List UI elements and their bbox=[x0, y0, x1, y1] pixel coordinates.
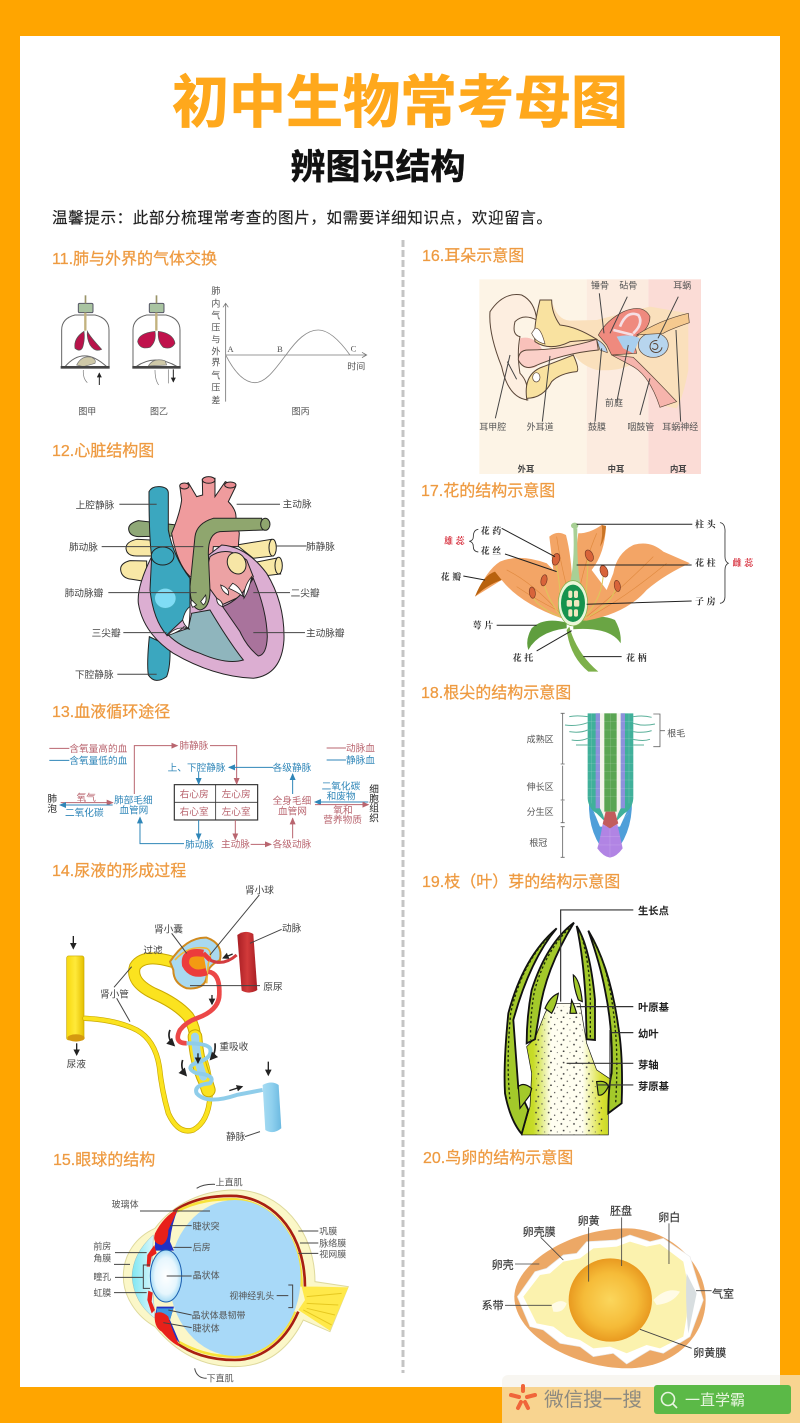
leaf texture bbox=[508, 928, 617, 1103]
valves bbox=[167, 577, 252, 636]
ear labels: 中耳 bbox=[608, 464, 624, 474]
flower labels: 花瓣 bbox=[441, 571, 464, 582]
flow labels: 肺静脉 bbox=[179, 740, 209, 752]
ear labels: 耳蜗神经 bbox=[662, 421, 698, 432]
heart chambers box: 左心房 bbox=[222, 788, 251, 800]
heart labels bbox=[65, 498, 345, 681]
pulmonary veins left bbox=[121, 521, 177, 582]
bell jar A bbox=[61, 295, 110, 416]
shell bbox=[514, 1228, 706, 1368]
heart chambers box bbox=[174, 785, 258, 820]
ear labels: 耳甲腔 bbox=[479, 421, 506, 432]
search button bbox=[654, 1385, 791, 1414]
outer leaves bbox=[505, 923, 622, 1134]
choroid and retina bbox=[173, 1196, 305, 1360]
vertical labels: 织 bbox=[369, 812, 379, 824]
legend left bbox=[49, 743, 128, 767]
egg labels: 卵白 bbox=[658, 1210, 680, 1224]
labels: 原尿 bbox=[263, 982, 283, 993]
eustachian tube bbox=[612, 355, 677, 407]
pressure curve chart: 肺 bbox=[211, 286, 220, 296]
vertical labels: 泡 bbox=[47, 803, 57, 815]
renal capsule bbox=[170, 938, 263, 1100]
anterior chamber and lens bbox=[132, 1235, 155, 1318]
flower labels bbox=[441, 519, 756, 663]
heart chambers box: 右心室 bbox=[180, 806, 209, 818]
eye labels bbox=[93, 1177, 346, 1383]
watermark text: 微信搜一搜 bbox=[544, 1389, 642, 1411]
collecting duct bbox=[67, 956, 85, 1042]
flow labels: 血管网 bbox=[119, 804, 148, 816]
eye labels: 玻璃体 bbox=[112, 1198, 139, 1209]
heading 17: 17.花的结构示意图 bbox=[421, 481, 555, 500]
vertical labels: 组 bbox=[369, 802, 379, 814]
bell jar A: 图甲 bbox=[78, 406, 96, 416]
legend right: 动脉血 bbox=[346, 743, 375, 755]
eye labels: 晶状体 bbox=[193, 1270, 220, 1281]
shell membrane bbox=[517, 1235, 703, 1364]
renal tubule bbox=[85, 958, 210, 1131]
heart labels: 主动脉瓣 bbox=[306, 628, 345, 640]
labels: 肾小球 bbox=[245, 884, 274, 896]
pistil and ovary bbox=[558, 523, 588, 626]
diagram: bird egg bbox=[482, 1203, 734, 1368]
legend right bbox=[327, 743, 375, 767]
pressure curve chart: 气 bbox=[211, 369, 220, 380]
egg labels bbox=[482, 1203, 734, 1359]
diagram: ear bbox=[479, 279, 701, 474]
epidermis and cortex bbox=[588, 713, 633, 822]
flow labels bbox=[65, 740, 362, 851]
heart chambers box: 右心房 bbox=[180, 788, 209, 800]
vertical labels: 细 bbox=[369, 784, 379, 796]
pressure curve chart: 与 bbox=[211, 335, 220, 345]
eye labels: 脉络膜 bbox=[319, 1237, 346, 1248]
eye labels: 睫状突 bbox=[193, 1220, 220, 1231]
pulmonary artery bbox=[190, 518, 263, 610]
root labels: 分生区 bbox=[527, 806, 554, 817]
heart labels: 三尖瓣 bbox=[92, 628, 121, 640]
heading 18: 18.根尖的结构示意图 bbox=[421, 683, 571, 702]
ear labels: 内耳 bbox=[670, 464, 687, 474]
right ventricle bbox=[168, 610, 243, 661]
flow labels: 和废物 bbox=[327, 790, 356, 802]
legend right: 静脉血 bbox=[346, 755, 375, 767]
pressure curve chart: 界 bbox=[211, 357, 220, 367]
flow labels: 肺动脉 bbox=[185, 839, 214, 851]
ear labels: 锤骨 bbox=[591, 279, 609, 290]
cochlea bbox=[638, 333, 668, 357]
ear labels: 鼓膜 bbox=[588, 421, 606, 432]
eye labels: 晶状体悬韧带 bbox=[192, 1309, 246, 1320]
egg labels: 卵壳膜 bbox=[523, 1224, 556, 1238]
bell jar B bbox=[132, 295, 181, 416]
eye labels: 下直肌 bbox=[207, 1372, 234, 1383]
flower labels: 萼片 bbox=[473, 620, 496, 631]
flow labels: 氧气 bbox=[77, 792, 96, 804]
ciliary body and iris bbox=[147, 1208, 180, 1347]
subtitle: 辨图识结构 bbox=[290, 148, 466, 187]
root cap purple bbox=[597, 824, 623, 858]
eye labels: 上直肌 bbox=[216, 1177, 243, 1188]
stem and sepals bbox=[527, 617, 621, 672]
pressure curve chart: 气 bbox=[211, 310, 220, 321]
heart chambers box: 左心室 bbox=[222, 806, 251, 818]
egg labels: 卵黄 bbox=[578, 1213, 600, 1227]
flower labels: 花药 bbox=[481, 525, 504, 536]
optic nerve bbox=[298, 1287, 348, 1331]
labels: 过滤 bbox=[143, 944, 163, 956]
flow labels: 肺部毛细 bbox=[114, 794, 153, 806]
heart labels: 二尖瓣 bbox=[291, 588, 320, 600]
diagram: eyeball bbox=[93, 1177, 348, 1383]
pressure curve chart: 差 bbox=[211, 395, 220, 406]
flow labels: 主动脉 bbox=[221, 838, 250, 850]
pulmonary veins right bbox=[237, 539, 282, 576]
left atrium bbox=[208, 552, 253, 605]
bud stem core bbox=[522, 1003, 620, 1135]
heading 12: 12.心脏结构图 bbox=[52, 442, 154, 460]
bud labels bbox=[561, 904, 670, 1093]
albumen bbox=[523, 1242, 688, 1353]
flow labels: 全身毛细 bbox=[273, 795, 311, 807]
search button: 一直学霸 bbox=[685, 1392, 745, 1409]
chalaza bbox=[552, 1290, 680, 1312]
flow labels: 各级静脉 bbox=[273, 762, 312, 774]
flow labels: 氧和 bbox=[333, 804, 353, 816]
eardrum bbox=[597, 339, 607, 353]
pressure curve chart: B bbox=[277, 344, 283, 354]
filaments and anthers bbox=[529, 549, 621, 618]
icon: search star bbox=[511, 1386, 535, 1408]
labels: 动脉 bbox=[282, 923, 302, 935]
arrows bbox=[73, 936, 268, 1091]
heart labels: 肺静脉 bbox=[306, 541, 335, 553]
egg labels: 卵壳 bbox=[492, 1258, 514, 1272]
labels: 尿液 bbox=[67, 1058, 86, 1070]
flow labels: 二氧化碳 bbox=[322, 780, 361, 792]
root labels: 根毛 bbox=[667, 728, 685, 739]
root labels: 成熟区 bbox=[527, 734, 554, 745]
eye labels: 睫状体 bbox=[193, 1323, 220, 1334]
labels: 肾小囊 bbox=[154, 923, 183, 935]
meristem bbox=[603, 812, 618, 828]
root labels: 根冠 bbox=[529, 837, 547, 848]
flow labels: 各级动脉 bbox=[273, 838, 312, 850]
bud labels: 幼叶 bbox=[638, 1027, 659, 1040]
root hairs bbox=[565, 716, 655, 745]
heart labels: 上腔静脉 bbox=[76, 499, 115, 511]
bud labels: 芽轴 bbox=[638, 1058, 659, 1071]
ear labels: 耳蜗 bbox=[673, 280, 691, 290]
eye labels: 视网膜 bbox=[319, 1248, 346, 1259]
flower labels: 雌蕊 bbox=[733, 557, 756, 568]
diagram: root tip bbox=[527, 713, 685, 858]
heading 13: 13.血液循环途径 bbox=[52, 703, 170, 721]
flower labels: 柱头 bbox=[695, 519, 718, 530]
diagram: heart bbox=[65, 477, 345, 681]
heading 11: 11.肺与外界的气体交换 bbox=[52, 250, 217, 268]
diagram: urine formation bbox=[67, 884, 302, 1143]
flow labels: 上、下腔静脉 bbox=[168, 762, 226, 774]
cochlear nerve bbox=[637, 313, 689, 335]
tip text: 温馨提示：此部分梳理常考查的图片，如需要详细知识点，欢迎留言。 bbox=[52, 209, 552, 227]
right atrium and superior vena cava bbox=[149, 487, 190, 635]
eye labels: 瞳孔 bbox=[93, 1271, 111, 1282]
vein vessel bbox=[263, 1082, 281, 1132]
ear labels: 外耳道 bbox=[527, 421, 554, 432]
bud labels: 叶原基 bbox=[638, 1001, 670, 1014]
flow arrows bbox=[60, 746, 368, 844]
ear labels: 外耳 bbox=[518, 464, 534, 474]
root labels bbox=[527, 713, 685, 857]
flow labels: 二氧化碳 bbox=[65, 807, 104, 819]
artery vessel bbox=[237, 932, 257, 993]
bud labels: 生长点 bbox=[638, 904, 669, 917]
ear labels bbox=[479, 279, 698, 474]
heart labels: 下腔静脉 bbox=[75, 669, 114, 681]
diagram: lung gas exchange bbox=[61, 286, 367, 416]
pressure curve chart: A bbox=[227, 344, 234, 354]
pressure curve chart: 压 bbox=[211, 323, 220, 333]
heading 15: 15.眼球的结构 bbox=[53, 1151, 155, 1169]
egg labels: 卵黄膜 bbox=[693, 1345, 726, 1359]
flow labels: 营养物质 bbox=[323, 814, 362, 826]
pressure curve chart: 内 bbox=[211, 298, 220, 309]
eye labels: 巩膜 bbox=[319, 1226, 337, 1236]
skull tissue bbox=[539, 300, 688, 408]
middle ear bbox=[598, 308, 650, 355]
heading 16: 16.耳朵示意图 bbox=[422, 246, 524, 265]
flower labels: 花柱 bbox=[695, 557, 718, 568]
labels: 肾小管 bbox=[100, 988, 129, 1000]
legend left: 含氧量低的血 bbox=[69, 755, 128, 767]
eye labels: 后房 bbox=[193, 1242, 211, 1253]
vitreous body bbox=[169, 1200, 301, 1356]
vertical labels: 胞 bbox=[369, 793, 379, 805]
labels: 静脉 bbox=[226, 1131, 246, 1143]
outer blue zone bbox=[589, 800, 632, 858]
legend left: 含氧量高的血 bbox=[69, 743, 128, 755]
eye labels: 视神经乳头 bbox=[229, 1290, 274, 1301]
flower labels: 花柄 bbox=[626, 652, 649, 663]
egg labels: 胚盘 bbox=[610, 1203, 632, 1217]
labels bbox=[67, 884, 302, 1143]
pressure curve chart: 外 bbox=[211, 345, 220, 356]
leaf primordia bbox=[518, 975, 608, 1108]
heart labels: 肺动脉瓣 bbox=[65, 588, 104, 600]
lower vena cava bbox=[148, 637, 170, 680]
flower labels: 花托 bbox=[513, 652, 536, 663]
eye labels: 角膜 bbox=[93, 1252, 111, 1263]
outer ear bbox=[490, 295, 537, 400]
ear labels: 砧骨 bbox=[619, 279, 637, 290]
sclera bbox=[123, 1190, 348, 1367]
flower labels: 子房 bbox=[695, 596, 718, 607]
watermark bar bbox=[502, 1375, 800, 1423]
cell grid bbox=[588, 713, 633, 858]
diagram: flower bbox=[441, 519, 756, 672]
diagram: leaf bud bbox=[505, 904, 670, 1135]
egg labels: 系带 bbox=[482, 1299, 504, 1312]
flower labels: 雄蕊 bbox=[444, 535, 467, 546]
petals bbox=[475, 525, 690, 621]
heading 20: 20.鸟卵的结构示意图 bbox=[423, 1148, 573, 1167]
root labels: 伸长区 bbox=[527, 781, 554, 792]
pressure curve chart bbox=[211, 286, 367, 416]
bell jar B: 图乙 bbox=[150, 406, 168, 416]
ear canal bbox=[518, 339, 598, 367]
ear zones background bbox=[479, 279, 701, 474]
vertical labels: 肺 bbox=[47, 794, 57, 805]
diagram: blood circulation flow chart bbox=[47, 740, 379, 851]
flower labels: 花丝 bbox=[481, 545, 504, 556]
title: 初中生物常考母图 bbox=[172, 71, 628, 135]
heart wall bbox=[138, 545, 284, 678]
pressure curve chart: 图丙 bbox=[292, 406, 310, 416]
heart labels: 肺动脉 bbox=[69, 542, 98, 554]
ear labels: 咽鼓管 bbox=[627, 421, 654, 432]
pressure curve chart: 压 bbox=[211, 383, 220, 393]
left ventricle bbox=[223, 578, 267, 656]
bud labels: 芽原基 bbox=[638, 1080, 670, 1093]
aorta bbox=[172, 478, 239, 587]
eye labels: 虹膜 bbox=[93, 1288, 111, 1298]
vertical labels bbox=[47, 784, 379, 824]
ear labels: 前庭 bbox=[605, 397, 623, 408]
egg labels: 气室 bbox=[712, 1286, 734, 1300]
labels: 重吸收 bbox=[219, 1041, 249, 1053]
yolk bbox=[569, 1258, 652, 1342]
flow labels: 血管网 bbox=[278, 805, 307, 817]
heading 14: 14.尿液的形成过程 bbox=[52, 862, 186, 880]
heart labels: 主动脉 bbox=[283, 498, 312, 510]
pressure curve chart: C bbox=[351, 343, 357, 353]
pressure curve chart: 时间 bbox=[347, 360, 365, 371]
eye labels: 前房 bbox=[93, 1240, 111, 1251]
heading 19: 19.枝（叶）芽的结构示意图 bbox=[422, 872, 620, 891]
